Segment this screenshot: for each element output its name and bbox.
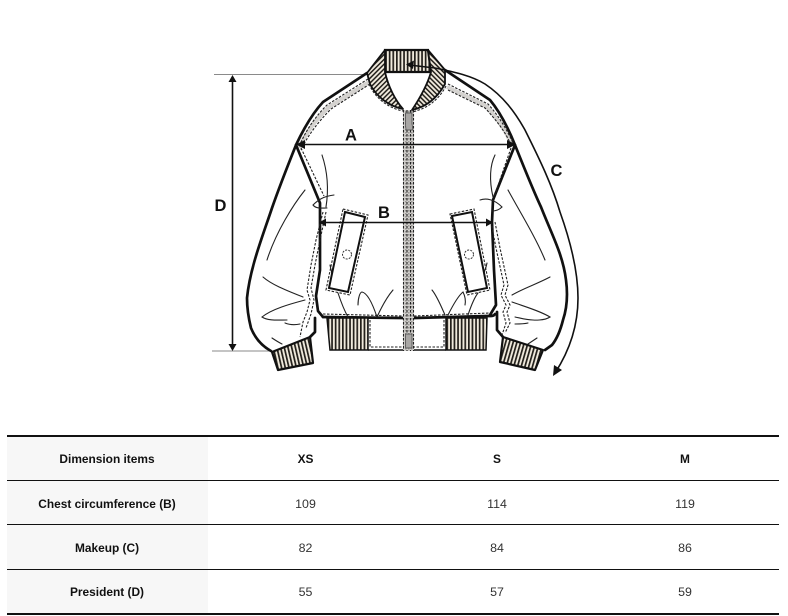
measurement B arrow — [319, 218, 493, 226]
label D: D — [215, 197, 227, 215]
row: president: 55 — [299, 585, 312, 599]
jacket technical drawing — [212, 50, 567, 351]
row: chest circumference: 119 — [675, 497, 695, 511]
row: makeup: 86 — [678, 541, 692, 555]
row: chest circumference: 109 — [295, 497, 316, 511]
label B: B — [378, 204, 390, 222]
header row: Dimension items — [59, 452, 155, 466]
right pocket — [450, 209, 490, 295]
hem rib left — [327, 318, 368, 350]
left pocket — [326, 209, 368, 295]
extent guide lines — [212, 74, 368, 351]
row: president: 59 — [678, 585, 692, 599]
collar — [367, 50, 446, 112]
row: chest circumference — [38, 497, 695, 511]
row: makeup: 82 — [299, 541, 312, 555]
header row: M — [680, 452, 690, 466]
row: president: 57 — [490, 585, 504, 599]
label column background — [7, 437, 208, 613]
row: president: President (D) — [70, 585, 144, 599]
measurement D arrow — [228, 75, 236, 351]
header row: XS — [298, 452, 313, 466]
label C: C — [551, 162, 563, 180]
jacket right sleeve — [445, 70, 567, 350]
centre zipper — [403, 110, 414, 351]
left cuff — [272, 337, 313, 370]
size table — [7, 435, 779, 615]
row: chest circumference: Chest circumference (B) — [38, 497, 176, 511]
measurement C arrow — [406, 60, 578, 376]
table rules — [7, 435, 779, 615]
hem rib right — [446, 318, 487, 350]
row: chest circumference: 114 — [487, 497, 507, 511]
measurement A arrow — [296, 140, 516, 149]
header row: S — [493, 452, 501, 466]
row: makeup: Makeup (C) — [75, 541, 139, 555]
row: makeup: 84 — [490, 541, 504, 555]
label A: A — [345, 126, 357, 144]
header row — [59, 452, 690, 466]
row: president — [70, 585, 692, 599]
row: makeup — [75, 541, 692, 555]
jacket left sleeve — [247, 73, 370, 351]
jacket body and hem — [323, 263, 495, 350]
right cuff — [500, 337, 543, 370]
